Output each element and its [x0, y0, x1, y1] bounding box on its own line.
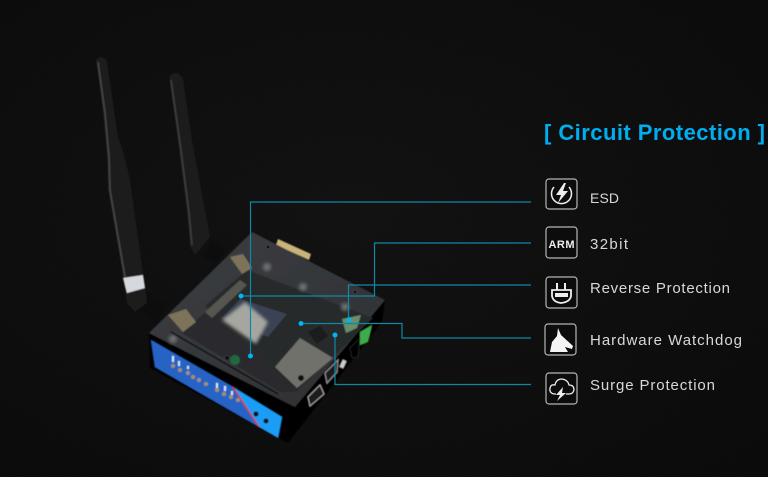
ethernet port 1 [308, 385, 324, 406]
cover glows [169, 263, 349, 343]
antenna: left [96, 57, 168, 322]
red stripe [233, 387, 259, 427]
icon: Hardware Watchdog [545, 324, 576, 355]
antenna port [264, 418, 268, 424]
ethernet port 2 [325, 360, 338, 383]
circuit board [205, 270, 373, 392]
metal shield [275, 338, 333, 388]
green terminal block [342, 315, 361, 333]
rear connector [276, 239, 311, 260]
router device [149, 232, 385, 443]
icon: ESD [546, 179, 577, 209]
title: [ Circuit Protection ] [544, 120, 765, 145]
wireless module [222, 302, 268, 344]
slot [171, 332, 278, 394]
indicator LEDs [171, 364, 240, 402]
label: ESD: ESD [590, 190, 619, 206]
device side face [288, 300, 385, 443]
panel labels [172, 356, 233, 395]
module socket [205, 280, 247, 318]
antenna: right [169, 73, 227, 263]
gold connector [168, 309, 196, 332]
antenna port [254, 412, 258, 416]
black chip [308, 326, 328, 344]
label: Hardware Watchdog: Hardware Watchdog [590, 332, 742, 349]
device top cover [149, 232, 385, 407]
callout dots [238, 294, 352, 358]
blue panel [151, 340, 259, 427]
green test pad [230, 355, 240, 365]
icon: ARM [546, 227, 577, 258]
callout lines [241, 202, 531, 384]
label: Surge Protection: Surge Protection [590, 377, 715, 394]
screws [224, 245, 357, 381]
label: 32bit: 32bit [590, 236, 629, 253]
gold connector [230, 254, 252, 274]
small switch [339, 360, 347, 368]
icon: Surge Protection [546, 373, 577, 404]
module chip [222, 299, 287, 337]
blue panel bright part [233, 387, 282, 438]
icon: ARM: ARM [548, 239, 574, 251]
lower board [182, 305, 296, 392]
green outer terminal [360, 325, 372, 345]
power jack [350, 338, 360, 358]
device front body [149, 333, 295, 443]
label: Reverse Protection: Reverse Protection [590, 280, 730, 297]
icon: Reverse Protection [546, 277, 577, 308]
